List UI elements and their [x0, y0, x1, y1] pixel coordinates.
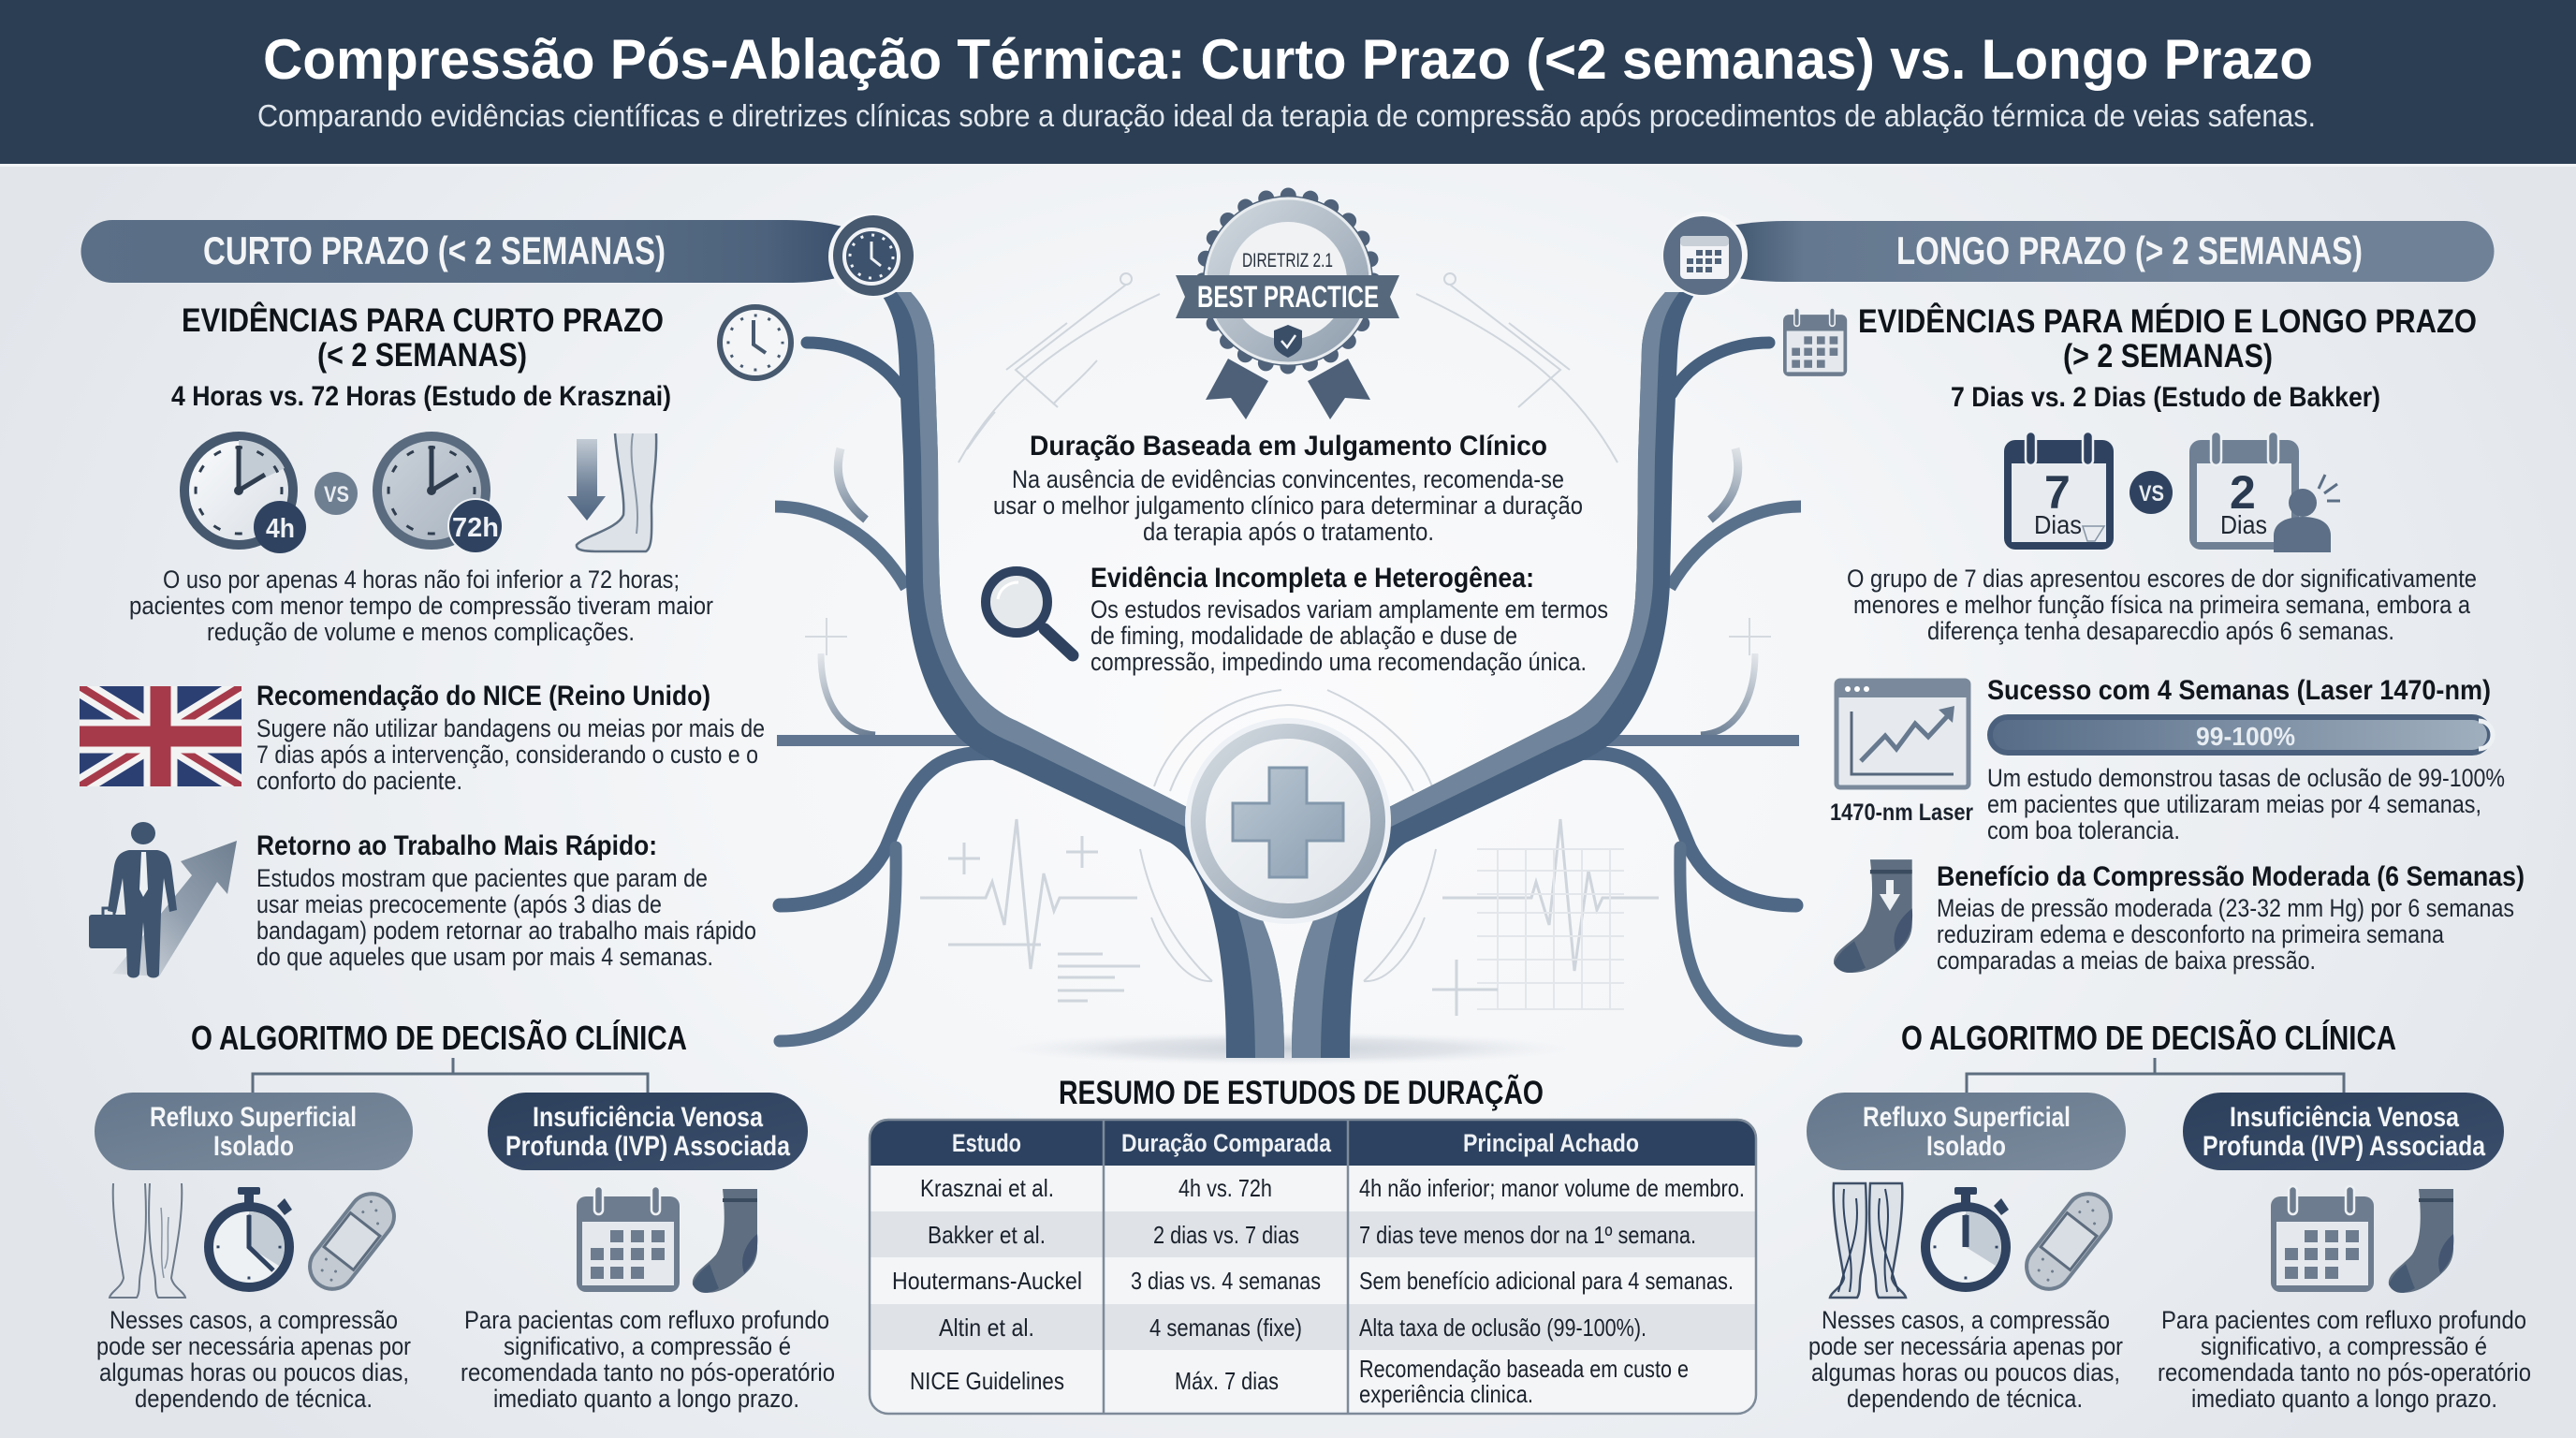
- text: deep reflux right: imediato quanto a longo prazo.: [2191, 1385, 2497, 1413]
- central text: clinical judgment: Na ausência de evidências convincentes, recomenda-se: [1012, 465, 1564, 493]
- icon: sock right: [2389, 1189, 2453, 1293]
- text: return to work: usar meias precocemente (após 3 dias de: [256, 890, 662, 918]
- text: return to work: Estudos mostram que pacientes que param de: [256, 864, 708, 892]
- icon: vs: VS: [324, 482, 349, 507]
- icon: calendar: [577, 1186, 680, 1292]
- panel: long term: [1661, 212, 2525, 975]
- pill: superficial reflux right: Isolado: [1926, 1131, 2006, 1162]
- icon: vs: [315, 472, 358, 515]
- text: deep reflux right: [2158, 1306, 2531, 1413]
- text: superficial reflux right: pode ser necessária apenas por: [1808, 1332, 2123, 1360]
- icon: 7 days calendar: [2004, 432, 2114, 550]
- central text: incomplete evidence: Os estudos revisados variam amplamente em termos: [1090, 595, 1608, 624]
- text: moderate compression: Benefício da Compressão Moderada (6 Semanas): [1937, 861, 2525, 892]
- icon: 72h clock: 72h: [452, 513, 499, 543]
- icon: magnifying glass: [986, 571, 1073, 655]
- text: 4h finding: redução de volume e menos complicações.: [207, 618, 635, 646]
- text: superficial reflux right: [1808, 1306, 2123, 1413]
- table header row: Estudo: [952, 1129, 1021, 1157]
- icon: 7 days calendar: Dias: [2034, 510, 2082, 539]
- text: 4h finding: O uso por apenas 4 horas não foi inferior a 72 horas;: [163, 565, 680, 594]
- heading: algorithm left: O ALGORITMO DE DECISÃO CLÍNICA: [191, 1018, 687, 1057]
- row: NICE: Recomendação baseada em custo e: [1359, 1355, 1689, 1383]
- row: Altin: 4 semanas (fixe): [1149, 1313, 1302, 1342]
- icon: arrow down and leg: [567, 433, 656, 551]
- row: NICE: NICE Guidelines: [910, 1367, 1064, 1395]
- best practice badge: [1176, 196, 1399, 419]
- row: NICE: Máx. 7 dias: [1175, 1367, 1279, 1395]
- title: Compressão Pós-Ablação Térmica: Curto Prazo (<2 semanas) vs. Longo Prazo: [263, 28, 2313, 91]
- text: superficial reflux: algumas horas ou poucos dias,: [99, 1358, 409, 1387]
- tree: right vein branches: [1292, 292, 1801, 1058]
- icon: bandage: [300, 1185, 403, 1298]
- icon: small clock: [720, 307, 791, 378]
- row: NICE: experiência clinica.: [1359, 1380, 1533, 1408]
- text: 4h finding: pacientes com menor tempo de compressão tiveram maior: [129, 592, 713, 620]
- tree: left vein branches: [775, 292, 1284, 1058]
- heading: short term evidence: (< 2 SEMANAS): [317, 337, 527, 374]
- row: Houtermans-Auckel: [892, 1267, 1734, 1295]
- row: Houtermans-Auckel: Sem benefício adicional para 4 semanas.: [1359, 1267, 1734, 1295]
- text: return to work: do que aqueles que usam por mais 4 semanas.: [256, 943, 713, 971]
- text: NICE recommendation: 7 dias após a intervenção, considerando o custo e o: [256, 741, 758, 769]
- icon: person with arrow: [89, 822, 237, 977]
- text: deep reflux: [461, 1306, 835, 1413]
- pill: deep venous insufficiency right: Profunda (IVP) Associada: [2203, 1131, 2485, 1162]
- row: Altin: Alta taxa de oclusão (99-100%).: [1359, 1313, 1647, 1342]
- row: Houtermans-Auckel: Houtermans-Auckel: [892, 1267, 1082, 1295]
- long term header bar: [1727, 221, 2494, 282]
- row: Bakker: 2 dias vs. 7 dias: [1153, 1221, 1299, 1249]
- central text: clinical judgment: da terapia após o tratamento.: [1143, 518, 1434, 546]
- text: 4h finding: [129, 565, 713, 646]
- text: deep reflux: significativo, a compressão é: [504, 1332, 791, 1360]
- row: Bakker: Bakker et al.: [928, 1221, 1046, 1249]
- text: Bakker finding: [1847, 565, 2477, 645]
- pill: superficial reflux right: Refluxo Superficial: [1863, 1102, 2071, 1133]
- icon: calendar node: [1661, 212, 1748, 298]
- pill: superficial reflux: Isolado: [213, 1131, 294, 1162]
- icon: small calendar: [1783, 308, 1847, 376]
- row: Krasznai: 4h não inferior; manor volume de membro.: [1359, 1174, 1745, 1202]
- text: deep reflux: recomendada tanto no pós-operatório: [461, 1358, 835, 1387]
- pill: superficial reflux right: [1807, 1093, 2126, 1170]
- icon: vs dark: VS: [2139, 481, 2164, 506]
- central text: clinical judgment: usar o melhor julgamento clínico para determinar a duração: [993, 492, 1583, 520]
- icon: shield: [1274, 325, 1302, 358]
- pill: deep venous insufficiency right: [2183, 1093, 2504, 1170]
- text: Bakker finding: diferença tenha desaparecdio após 6 semanas.: [1927, 617, 2394, 645]
- icon: stopwatch right: [1925, 1187, 2009, 1287]
- row: Altin: [939, 1313, 1647, 1342]
- panel: summary table: [870, 1075, 1756, 1414]
- row: Krasznai: Krasznai et al.: [920, 1174, 1054, 1202]
- row: Bakker: [928, 1221, 1696, 1249]
- text: deep reflux: Para pacientas com refluxo profundo: [464, 1306, 829, 1334]
- progress bar: 99-100%: [2196, 722, 2295, 751]
- central text: incomplete evidence: Evidência Incompleta e Heterogênea:: [1090, 563, 1534, 594]
- subtitle: Comparando evidências científicas e diretrizes clínicas sobre a duração ideal da terapia de compressão após procedimentos de ablação térmica de veias safenas.: [257, 98, 2316, 133]
- text: superficial reflux right: Nesses casos, a compressão: [1822, 1306, 2110, 1334]
- icon: legs with veins: [1830, 1183, 1906, 1298]
- icon: compression sock: [1834, 859, 1912, 973]
- heading: long term evidence: [1858, 302, 2477, 413]
- row: Krasznai: 4h vs. 72h: [1178, 1174, 1272, 1202]
- icon: UK flag: [80, 686, 242, 786]
- text: NICE recommendation: [256, 681, 765, 795]
- icon: 72h clock: [377, 436, 503, 553]
- badge text: best practice: BEST PRACTICE: [1197, 280, 1379, 314]
- text: superficial reflux: [96, 1306, 411, 1413]
- icon: 2 days calendar with person in pain: Dias: [2220, 510, 2267, 539]
- icon: sock: [693, 1189, 757, 1293]
- heading: long term evidence: EVIDÊNCIAS PARA MÉDIO E LONGO PRAZO: [1858, 302, 2477, 340]
- heading: table title: RESUMO DE ESTUDOS DE DURAÇÃO: [1059, 1075, 1544, 1111]
- text: deep reflux right: Para pacientes com refluxo profundo: [2161, 1306, 2526, 1334]
- pill: deep venous insufficiency: Insuficiência Venosa: [533, 1102, 763, 1133]
- pill: deep venous insufficiency: [488, 1093, 808, 1170]
- decorative floor shadow: [998, 1032, 1578, 1065]
- row: Bakker: 7 dias teve menos dor na 1º semana.: [1359, 1221, 1696, 1249]
- icon: 7 days calendar: 7: [2044, 466, 2071, 519]
- central text: incomplete evidence: de fiming, modalidade de ablação e duse de: [1090, 622, 1517, 650]
- central text: incomplete evidence: [1090, 563, 1608, 676]
- text: 4 week success with progress bar: [1987, 675, 2505, 844]
- text: Bakker finding: O grupo de 7 dias apresentou escores de dor significativamente: [1847, 565, 2477, 593]
- central medical cross medallion: [1185, 718, 1391, 924]
- text: return to work: bandagam) podem retornar ao trabalho mais rápido: [256, 917, 756, 945]
- heading: algorithm right: O ALGORITMO DE DECISÃO CLÍNICA: [1901, 1018, 2396, 1057]
- progress bar: [1987, 714, 2493, 756]
- text: superficial reflux right: dependendo de técnica.: [1847, 1385, 2083, 1413]
- central text: clinical judgment: [993, 431, 1583, 546]
- icon: 2 days calendar with person in pain: 2: [2230, 466, 2256, 519]
- long term header bar: LONGO PRAZO (> 2 SEMANAS): [1896, 228, 2363, 272]
- text: superficial reflux: Nesses casos, a compressão: [110, 1306, 398, 1334]
- text: 4 week success with progress bar: Um estudo demonstrou tasas de oclusão de 99-100%: [1987, 764, 2505, 792]
- text: superficial reflux right: algumas horas ou poucos dias,: [1811, 1358, 2120, 1387]
- icon: clock node: [828, 213, 915, 300]
- icon: 2 days calendar with person in pain: [2189, 432, 2340, 552]
- decorative arcs, ECG lines: [805, 273, 1771, 1016]
- text: deep reflux: imediato quanto a longo prazo.: [493, 1385, 799, 1413]
- icon: bandage right: [2017, 1185, 2120, 1298]
- badge text: guideline: DIRETRIZ 2.1: [1242, 250, 1333, 271]
- icon: vs dark: [2130, 471, 2173, 514]
- text: superficial reflux: dependendo de técnica.: [135, 1385, 373, 1413]
- heading: long term evidence: 7 Dias vs. 2 Dias (Estudo de Bakker): [1951, 382, 2380, 413]
- pill: deep venous insufficiency: Profunda (IVP) Associada: [505, 1131, 790, 1162]
- text: moderate compression: [1937, 861, 2525, 975]
- text: return to work: Retorno ao Trabalho Mais Rápido:: [256, 830, 657, 861]
- text: NICE recommendation: Recomendação do NICE (Reino Unido): [256, 681, 710, 712]
- text: 4 week success with progress bar: Sucesso com 4 Semanas (Laser 1470-nm): [1987, 675, 2491, 706]
- text: NICE recommendation: conforto do paciente.: [256, 767, 462, 795]
- short term header bar: [80, 220, 842, 283]
- row: Altin: Altin et al.: [939, 1313, 1034, 1342]
- heading: short term evidence: 4 Horas vs. 72 Horas (Estudo de Krasznai): [171, 381, 671, 412]
- text: 4 week success with progress bar: com boa tolerancia.: [1987, 816, 2180, 844]
- table: [870, 1120, 1756, 1414]
- panel: short term: [80, 213, 915, 977]
- pill: superficial reflux: Refluxo Superficial: [150, 1102, 357, 1133]
- text: Bakker finding: menores e melhor função física na primeira semana, embora a: [1853, 591, 2471, 619]
- table header row: Duração Comparada: [1121, 1129, 1332, 1157]
- text: NICE recommendation: Sugere não utilizar bandagens ou meias por mais de: [256, 714, 765, 742]
- pill: deep venous insufficiency right: Insuficiência Venosa: [2230, 1102, 2459, 1133]
- panel: clinical algorithm left: [95, 1018, 835, 1413]
- text: 4 week success with progress bar: em pacientes que utilizaram meias por 4 semanas,: [1987, 790, 2481, 818]
- icon: laser chart: 1470-nm Laser: [1830, 800, 1973, 826]
- text: deep reflux right: recomendada tanto no pós-operatório: [2158, 1358, 2531, 1387]
- central text: clinical judgment: Duração Baseada em Julgamento Clínico: [1030, 431, 1547, 462]
- text: moderate compression: comparadas a meias de baixa pressão.: [1937, 946, 2316, 975]
- heading: long term evidence: (> 2 SEMANAS): [2063, 338, 2273, 374]
- icon: calendar right: [2271, 1186, 2374, 1292]
- pill: superficial reflux: [95, 1093, 413, 1170]
- text: moderate compression: reduziram edema e desconforto na primeira semana: [1937, 920, 2445, 948]
- icon: laser chart: [1830, 681, 1973, 826]
- row: Houtermans-Auckel: 3 dias vs. 4 semanas: [1131, 1267, 1321, 1295]
- icon: 4h clock: [184, 436, 306, 553]
- table header row: Principal Achado: [1463, 1129, 1639, 1157]
- table header row: [952, 1129, 1639, 1157]
- header band: [0, 0, 2576, 167]
- heading: short term evidence: EVIDÊNCIAS PARA CURTO PRAZO: [182, 301, 664, 339]
- row: Krasznai: [920, 1174, 1745, 1202]
- text: deep reflux right: significativo, a compressão é: [2201, 1332, 2487, 1360]
- text: return to work: [256, 830, 756, 971]
- icon: 4h clock: 4h: [266, 514, 295, 544]
- heading: short term evidence: [171, 301, 671, 412]
- icon: stopwatch: [209, 1187, 292, 1287]
- text: superficial reflux: pode ser necessária apenas por: [96, 1332, 411, 1360]
- central text: incomplete evidence: compressão, impedindo uma recomendação única.: [1090, 648, 1587, 676]
- icon: legs: [110, 1183, 185, 1298]
- short term header bar: CURTO PRAZO (< 2 SEMANAS): [203, 228, 666, 272]
- row: NICE: [910, 1355, 1689, 1408]
- panel: clinical algorithm right: [1807, 1018, 2531, 1413]
